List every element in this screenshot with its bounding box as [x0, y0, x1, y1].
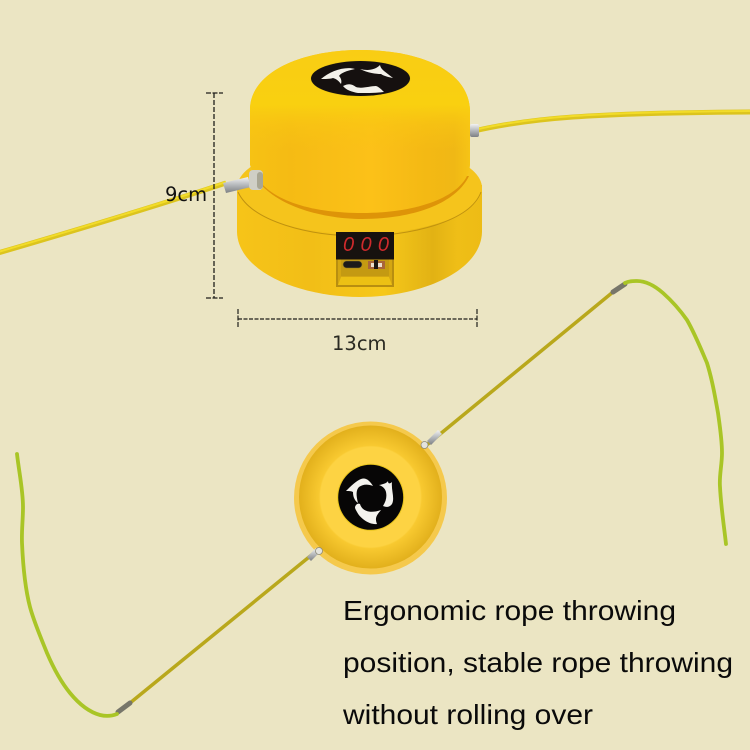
LED digits: 000	[343, 234, 389, 256]
control panel	[336, 232, 394, 287]
caption: position, stable rope throwing	[343, 647, 733, 678]
width dimension line	[238, 309, 477, 327]
base body	[237, 185, 482, 297]
caption: Ergonomic rope throwing	[343, 595, 676, 626]
cap	[250, 50, 470, 213]
top-view ferrule lower left	[307, 548, 322, 561]
rope upper right	[428, 281, 726, 544]
rope lower left	[17, 454, 314, 716]
logo swirl	[321, 65, 393, 93]
power switch	[368, 260, 385, 269]
height dimension line	[206, 93, 223, 298]
caption	[342, 595, 733, 730]
device: side view	[237, 50, 482, 297]
device: top-down view	[294, 422, 447, 574]
top-view ferrule upper right	[421, 430, 442, 448]
cap top highlight	[250, 50, 470, 150]
lower bezel	[336, 258, 394, 287]
logo swirl	[346, 478, 393, 524]
width label: 13cm	[332, 332, 387, 355]
height label: 9cm	[165, 183, 207, 206]
right cable of top device	[470, 111, 750, 137]
nut and ferrule on left side	[223, 170, 263, 193]
LED display	[336, 232, 394, 260]
base shoulder	[237, 142, 482, 234]
cap shadow	[256, 176, 469, 219]
caption: without rolling over	[342, 699, 593, 730]
USB-C port	[343, 261, 362, 268]
logo disc	[310, 60, 410, 96]
left cable of top device	[0, 182, 226, 253]
